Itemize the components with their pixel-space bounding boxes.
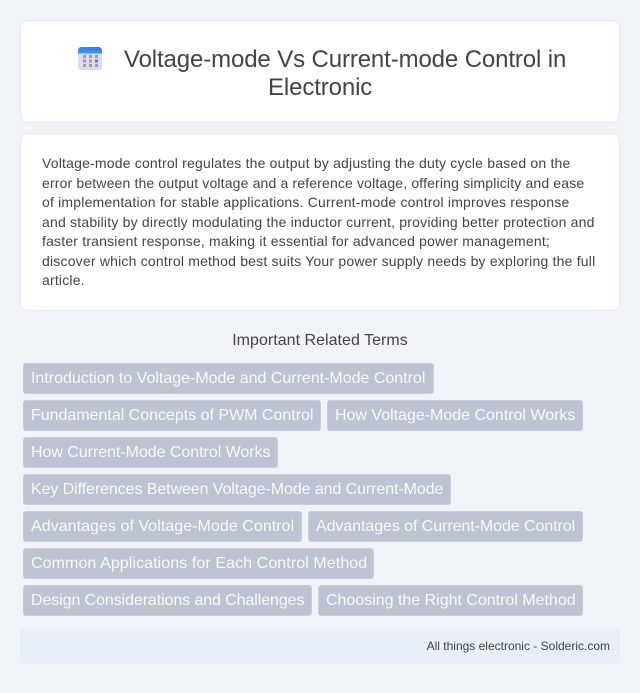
chip bbox=[308, 511, 583, 542]
chip bbox=[23, 437, 278, 468]
panel: description bbox=[20, 133, 620, 311]
text block: summary paragraph: faster transient response, making it essential for advanced power management; bbox=[42, 233, 550, 249]
panel: title card bbox=[20, 20, 620, 123]
footer bbox=[20, 629, 620, 663]
chip: Choosing the Right Control Method bbox=[326, 592, 576, 609]
text block: summary paragraph: error between the output voltage and a reference voltage, offering simplicity and ease bbox=[42, 175, 584, 191]
chip bbox=[23, 548, 374, 579]
text block: summary paragraph: and stability by directly modulating the inductor current, providing better protection and bbox=[42, 214, 595, 230]
chip: How Current-Mode Control Works bbox=[31, 444, 270, 461]
text block: summary paragraph: article. bbox=[42, 272, 85, 288]
text block: summary paragraph bbox=[42, 155, 595, 288]
title: Electronic bbox=[268, 74, 372, 101]
chip: Key Differences Between Voltage-Mode and Current-Mode bbox=[31, 481, 443, 498]
text block: summary paragraph: of implementation for stable applications. Current-mode control improves response bbox=[42, 194, 569, 210]
chip bbox=[318, 585, 583, 616]
chip: Introduction to Voltage-Mode and Current-Mode Control bbox=[31, 370, 425, 387]
chip: Common Applications for Each Control Method bbox=[31, 555, 367, 572]
chip: Fundamental Concepts of PWM Control bbox=[31, 407, 313, 424]
heading: related terms: Important Related Terms bbox=[232, 332, 408, 349]
footer: All things electronic - Solderic.com bbox=[427, 639, 610, 653]
text block: summary paragraph: Voltage-mode control regulates the output by adjusting the duty cycle based on the bbox=[42, 155, 570, 171]
chip: Design Considerations and Challenges bbox=[31, 592, 304, 609]
chip: Advantages of Voltage-Mode Control bbox=[31, 518, 294, 535]
chip bbox=[23, 400, 321, 431]
chip bbox=[23, 363, 434, 394]
icon: calendar grid bbox=[78, 47, 102, 70]
chip: How Voltage-Mode Control Works bbox=[335, 407, 575, 424]
title bbox=[124, 46, 566, 101]
chip bbox=[23, 511, 302, 542]
text block: summary paragraph: discover which control method best suits Your power supply needs by exploring the full bbox=[42, 253, 595, 269]
title: Voltage-mode Vs Current-mode Control in bbox=[124, 46, 566, 73]
chip bbox=[23, 474, 451, 505]
chip bbox=[327, 400, 583, 431]
chip bbox=[23, 585, 312, 616]
chip: Advantages of Current-Mode Control bbox=[316, 518, 575, 535]
panel: term chips bbox=[23, 363, 583, 616]
